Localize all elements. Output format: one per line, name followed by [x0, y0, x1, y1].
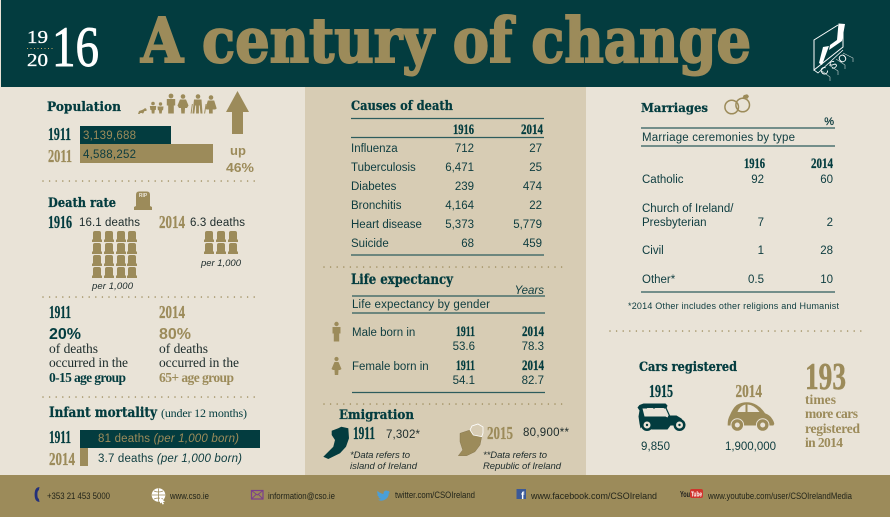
- panel: life expectancy: [332, 272, 545, 392]
- heading: marriages: Marriages: [641, 100, 708, 115]
- heading: life expectancy: Life expectancy: [351, 272, 454, 288]
- table: causes of death: 68: [461, 238, 474, 250]
- icon: map of Republic of Ireland: [458, 424, 483, 456]
- contact: youtube: www.youtube.com/user/CSOIrelandMedia: [707, 491, 852, 501]
- 1916-2016 logo: 19: [27, 27, 48, 47]
- panel: deaths by age 2014: 80%: [159, 326, 191, 343]
- row: female: Female born in: [352, 361, 429, 373]
- table: causes of death: Suicide: [351, 238, 389, 250]
- table: marriages: 10: [820, 274, 833, 286]
- icon: family figures: [138, 94, 217, 114]
- emigration 2015: [483, 423, 570, 472]
- heading: infant mortality: (under 12 months): [161, 406, 247, 420]
- callout: 193 times more cars: in 2014: [805, 435, 843, 450]
- bar chart: infant mortality: 81 deaths (per 1,000 born): [98, 433, 239, 445]
- table: marriages: 92: [751, 174, 764, 186]
- table: causes of death: 1916: [453, 122, 474, 138]
- callout: 193 times more cars: 193: [805, 356, 846, 398]
- panel: deaths by age 2014: of deaths: [159, 341, 208, 356]
- row: male: 2014: [522, 324, 544, 340]
- footer band: [0, 475, 890, 517]
- table: marriages: Church of Ireland/: [642, 203, 734, 215]
- 1916 rate: 1916: [48, 212, 72, 232]
- panel: deaths by age 1911: [49, 302, 128, 385]
- table: marriages: 1: [758, 245, 764, 257]
- table: causes of death: Bronchitis: [351, 200, 402, 212]
- bar chart: population: 2011: [48, 146, 72, 166]
- table: causes of death: 712: [455, 143, 474, 155]
- contact: phone: +353 21 453 5000: [47, 491, 110, 501]
- contact: youtube: Tube: [691, 490, 702, 498]
- 1916 rate: 16.1 deaths: [79, 217, 140, 229]
- panel: deaths by age 2014: 2014: [159, 302, 185, 322]
- panel: deaths by age 1911: 0-15 age group: [49, 370, 126, 385]
- table: causes of death: 474: [523, 181, 543, 193]
- contact: email: information@cso.ie: [268, 491, 335, 501]
- panel: deaths by age 1911: 1911: [49, 302, 71, 322]
- icon: vintage car: [638, 404, 686, 431]
- icon: map of island of Ireland: [323, 427, 349, 459]
- table: marriages: Presbyterian: [642, 217, 707, 229]
- callout: 193 times more cars: more cars: [805, 406, 858, 421]
- panel: deaths by age 1911: occurred in the: [49, 355, 128, 370]
- table: marriages: [642, 156, 833, 286]
- bar chart: infant mortality: 1911: [49, 427, 71, 447]
- panel: deaths by age 1911: 20%: [49, 326, 81, 343]
- value: 9,850: 9,850: [641, 441, 670, 453]
- contact: facebook: [516, 489, 657, 502]
- table: marriages: 28: [820, 245, 833, 257]
- panel: causes of death: [351, 99, 544, 255]
- icon: modern car: [728, 402, 774, 431]
- bar chart: infant mortality: [49, 427, 260, 469]
- contact: facebook: f: [521, 491, 525, 502]
- table: causes of death: 5,779: [513, 219, 542, 231]
- bar chart: population: 4,588,252: [83, 149, 136, 161]
- emigration 1911: 7,302*: [386, 429, 421, 441]
- icon: tombstones 2014: [204, 231, 238, 254]
- footnote: marriages: *2014 Other includes other religions and Humanist: [628, 301, 839, 311]
- table: marriages: Other*: [642, 274, 676, 286]
- table: causes of death: 2014: [521, 122, 543, 138]
- icon: up arrow: [226, 91, 249, 134]
- 2014 rate: 6.3 deaths: [190, 217, 245, 229]
- heading: population: Population: [47, 100, 122, 115]
- emigration 1911: 1911: [353, 423, 375, 443]
- row: female: 82.7: [522, 375, 544, 387]
- contact: twitter: [377, 490, 475, 501]
- bar chart: population: [48, 124, 213, 166]
- table: causes of death: 27: [529, 143, 542, 155]
- panel: marriages: [628, 95, 839, 311]
- icon: female figure: [332, 357, 342, 375]
- row: male: 1911: [456, 324, 475, 340]
- table: marriages: 1916: [744, 156, 765, 172]
- contact: youtube: You: [680, 490, 690, 499]
- callout: 193 times more cars: registered: [805, 421, 860, 436]
- row: male: 78.3: [522, 341, 544, 353]
- table: causes of death: 4,164: [445, 200, 475, 212]
- label: 1915: 1915: [649, 381, 673, 401]
- icon: male figure: [332, 322, 340, 342]
- row: male: 53.6: [453, 341, 475, 353]
- CSO logo: CSO: [818, 52, 850, 78]
- table: causes of death: Influenza: [351, 143, 398, 155]
- bar chart: population: 3,139,688: [83, 130, 136, 142]
- row: male: Male born in: [352, 327, 415, 339]
- callout: up 46%: up: [230, 143, 246, 158]
- contact: website: [152, 488, 209, 504]
- panel: emigration: [323, 408, 570, 472]
- heading: death rate: Death rate: [48, 196, 116, 211]
- contact: website: www.cso.ie: [169, 491, 209, 501]
- label: years: Years: [515, 285, 544, 297]
- callout: 193 times more cars: times: [805, 392, 836, 407]
- panel: centre column background: [305, 87, 586, 475]
- panel: death rate: [48, 192, 245, 292]
- table: marriages: 0.5: [748, 274, 764, 286]
- callout: up 46%: 46%: [226, 160, 254, 175]
- label: per 1,000 (2014): per 1,000: [200, 258, 242, 269]
- icon: large tombstone: [134, 192, 152, 210]
- panel: deaths by age 2014: 65+ age group: [159, 370, 234, 385]
- title: A century of change: [140, 4, 751, 77]
- table: causes of death: 459: [523, 238, 542, 250]
- panel: deaths by age 2014: [159, 302, 239, 385]
- callout: up 46%: [226, 143, 254, 175]
- row: female: [352, 358, 544, 387]
- callout: 193 times more cars: [805, 356, 860, 450]
- bar chart: infant mortality: 3.7 deaths (per 1,000 born): [98, 453, 242, 465]
- table: marriages: 2: [827, 217, 833, 229]
- bar chart: population: 1911: [48, 124, 71, 144]
- label: percent: %: [824, 116, 834, 128]
- icon: tombstones 1916: [92, 231, 137, 278]
- emigration 1911: [350, 423, 421, 472]
- 1916-2016 logo: [27, 16, 99, 79]
- heading: infant mortality: Infant mortality: [49, 405, 158, 421]
- emigration 2015: 2015: [487, 423, 513, 443]
- label: per 1,000 (1916): per 1,000: [91, 281, 134, 292]
- subheading: ceremonies by type: Marriage ceremonies by type: [642, 132, 795, 144]
- table: marriages: Civil: [642, 245, 664, 257]
- 1916-2016 logo: 20: [27, 50, 48, 70]
- contact: email: [252, 490, 335, 501]
- table: causes of death: 239: [455, 181, 474, 193]
- icon: wedding rings: [725, 95, 750, 114]
- emigration 1911: island of Ireland: [350, 461, 418, 472]
- 1916-2016 logo: 16: [52, 16, 99, 79]
- emigration 2015: 80,900**: [523, 427, 570, 439]
- panel: cars registered: [638, 356, 860, 453]
- bar chart: infant mortality: 2014: [49, 449, 75, 469]
- CSO logo: [814, 24, 853, 81]
- heading: emigration: Emigration: [339, 408, 415, 423]
- table: causes of death: 6,471: [445, 162, 474, 174]
- 1916 rate: [48, 212, 140, 232]
- heading: infant mortality: [49, 405, 247, 421]
- table: causes of death: [351, 118, 544, 255]
- table: causes of death: 22: [529, 200, 542, 212]
- header band: [1, 0, 890, 87]
- value: 1,900,000: 1,900,000: [725, 441, 776, 453]
- subheading: by gender: Life expectancy by gender: [352, 299, 490, 311]
- label: 2014 cars: 2014: [736, 381, 762, 401]
- table: causes of death: Diabetes: [351, 181, 397, 193]
- icon: large tombstone: RIP: [139, 193, 148, 199]
- contact: youtube: [680, 489, 852, 501]
- table: causes of death: Heart disease: [351, 219, 422, 231]
- row: female: 1911: [456, 358, 475, 374]
- table: causes of death: 5,373: [445, 219, 474, 231]
- 2014 rate: 2014: [159, 212, 185, 232]
- panel: population: [47, 91, 254, 175]
- contact: phone: [35, 488, 110, 502]
- table: marriages: 2014: [811, 156, 833, 172]
- row: female: 54.1: [453, 375, 475, 387]
- contact: twitter: twitter.com/CSOIreland: [395, 490, 475, 500]
- contact: facebook: www.facebook.com/CSOIreland: [530, 491, 657, 501]
- row: male: [352, 324, 544, 353]
- heading: cars registered: Cars registered: [639, 360, 737, 375]
- row: female: 2014: [522, 358, 544, 374]
- emigration 1911: *Data refers to: [350, 450, 410, 461]
- table: causes of death: Tuberculosis: [351, 162, 416, 174]
- table: marriages: 60: [820, 174, 833, 186]
- table: marriages: 7: [758, 217, 764, 229]
- panel: deaths by age 2014: occurred in the: [159, 355, 239, 370]
- 2014 rate: [159, 212, 245, 232]
- table: causes of death: 25: [529, 162, 542, 174]
- emigration 2015: Republic of Ireland: [483, 461, 562, 472]
- emigration 2015: **Data refers to: [483, 450, 547, 461]
- heading: causes of death: Causes of death: [351, 99, 453, 114]
- panel: deaths by age 1911: of deaths: [49, 341, 98, 356]
- table: marriages: Catholic: [642, 174, 684, 186]
- panel: infant mortality: [49, 405, 260, 469]
